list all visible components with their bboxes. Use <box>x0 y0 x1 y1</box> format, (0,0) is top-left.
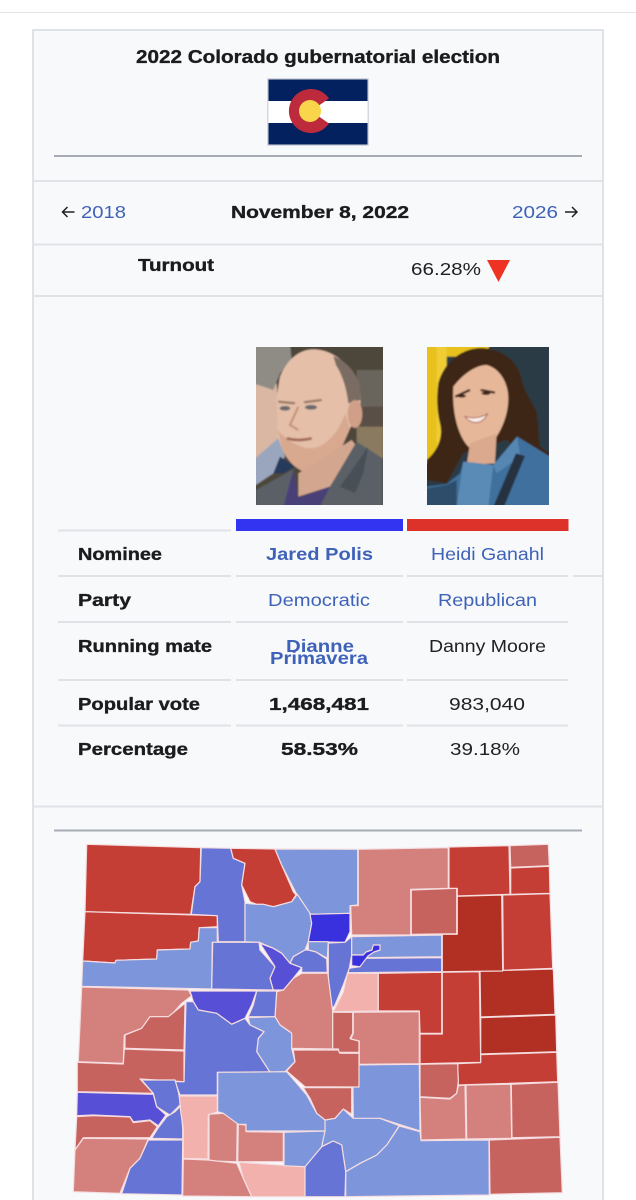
county: Gilpin <box>308 942 328 958</box>
county: El Paso <box>351 1012 419 1064</box>
row: running mate: Primavera <box>270 648 368 668</box>
county: Crowley <box>420 1064 458 1098</box>
title: 2022 Colorado gubernatorial election <box>136 46 500 67</box>
county: Bent <box>466 1084 512 1139</box>
county: Park <box>275 973 333 1049</box>
county: Larimer <box>275 849 358 914</box>
results table <box>58 530 603 759</box>
row: party: Democratic <box>268 590 370 610</box>
county: San Juan <box>152 1106 183 1139</box>
row: popular vote <box>78 694 525 714</box>
county: Pitkin <box>190 991 257 1024</box>
county: Sedgwick <box>510 844 549 867</box>
county: Montrose <box>77 1049 184 1093</box>
turnout value: 66.28% <box>411 259 481 279</box>
county: Delta <box>125 1003 185 1050</box>
county: Logan <box>449 846 510 896</box>
county: Boulder <box>308 913 350 942</box>
county: Morgan <box>411 888 457 934</box>
county: Summit <box>260 943 302 990</box>
election date: November 8, 2022 <box>231 202 409 222</box>
county: Archuleta <box>183 1159 252 1197</box>
row: percentage: 58.53% <box>281 739 359 759</box>
county: Dolores <box>75 1116 157 1150</box>
county: Denver <box>352 945 380 967</box>
row: nominee: Nominee <box>78 544 162 564</box>
next election link: 2026 <box>512 202 558 222</box>
county: Yuma <box>503 894 553 970</box>
row: nominee: Jared Polis <box>266 544 373 564</box>
county: Huerfano <box>322 1109 399 1172</box>
turnout label: Turnout <box>138 255 214 275</box>
county: Pueblo <box>353 1064 420 1131</box>
county: Phillips <box>511 866 550 894</box>
county: Lake <box>248 991 277 1017</box>
county: La Plata <box>122 1140 183 1195</box>
portrait: Heidi Ganahl <box>425 343 550 507</box>
row: party: Party <box>78 590 131 610</box>
icon: right arrow <box>565 207 577 217</box>
county: Lincoln <box>420 972 481 1064</box>
row: percentage <box>78 739 520 759</box>
county: Garfield <box>82 928 217 989</box>
county: Costilla <box>303 1141 346 1197</box>
county: Jackson <box>231 848 296 907</box>
county: Rio Blanco <box>83 912 217 963</box>
county: Kit Carson <box>480 969 555 1017</box>
county: Otero <box>420 1085 466 1140</box>
county: Cheyenne <box>481 1015 557 1054</box>
county: Ouray <box>142 1080 181 1115</box>
date navigation row <box>62 202 577 222</box>
row: running mate <box>78 636 546 668</box>
row: running mate: Dianne <box>286 636 354 656</box>
county: Rio Grande <box>238 1124 283 1162</box>
county: Elbert <box>378 972 442 1033</box>
table grid lines <box>58 530 603 726</box>
row: popular vote: Popular vote <box>78 694 200 714</box>
candidate colour bar: Democratic <box>236 519 403 531</box>
county: Saguache <box>218 1072 325 1131</box>
county: Baca <box>489 1137 562 1194</box>
county: Teller <box>333 1012 359 1052</box>
row: percentage: Percentage <box>78 739 188 759</box>
county: Las Animas <box>346 1126 489 1197</box>
county: Adams <box>352 935 442 958</box>
row: party: Republican <box>438 590 537 610</box>
county: Alamosa <box>284 1131 325 1167</box>
county: Douglas <box>333 973 378 1012</box>
row: running mate: Danny Moore <box>429 636 546 656</box>
row: popular vote: 983,040 <box>449 694 525 714</box>
icon: Colorado flag <box>267 78 369 146</box>
row: nominee <box>78 544 544 564</box>
county: Conejos <box>239 1162 305 1197</box>
previous election link: 2018 <box>81 202 126 222</box>
county: Kiowa <box>458 1052 558 1085</box>
candidate colour bar: Republican <box>407 519 568 531</box>
county: Jefferson <box>328 937 352 1012</box>
county: Gunnison <box>175 1002 270 1095</box>
county: Chaffee <box>248 1017 295 1072</box>
county: Hinsdale <box>179 1096 217 1159</box>
county: Moffat <box>85 844 201 914</box>
county: Clear Creek <box>290 950 327 972</box>
county: Custer <box>303 1088 352 1120</box>
icon: down triangle <box>487 260 510 282</box>
row: popular vote: 1,468,481 <box>269 694 369 714</box>
row: nominee: Heidi Ganahl <box>431 544 544 564</box>
county: Mineral <box>209 1113 237 1162</box>
row: party <box>78 590 537 610</box>
county: San Miguel <box>77 1092 166 1126</box>
county: Routt <box>191 848 245 942</box>
county: Montezuma <box>73 1138 148 1193</box>
county: Eagle <box>212 942 275 990</box>
county results map <box>73 844 562 1197</box>
row dividers <box>33 180 603 808</box>
portrait: Jared Polis <box>253 343 387 510</box>
county: Grand <box>245 894 312 963</box>
county: Mesa <box>78 987 192 1063</box>
county: Fremont <box>287 1050 359 1087</box>
turnout row <box>138 255 510 282</box>
row: percentage: 39.18% <box>450 739 520 759</box>
icon: left arrow <box>62 207 74 217</box>
county: Arapahoe <box>348 958 442 973</box>
county: Washington <box>442 895 503 972</box>
county: Weld <box>351 848 448 935</box>
county: Prowers <box>511 1082 560 1138</box>
row: running mate: Running mate <box>78 636 212 656</box>
